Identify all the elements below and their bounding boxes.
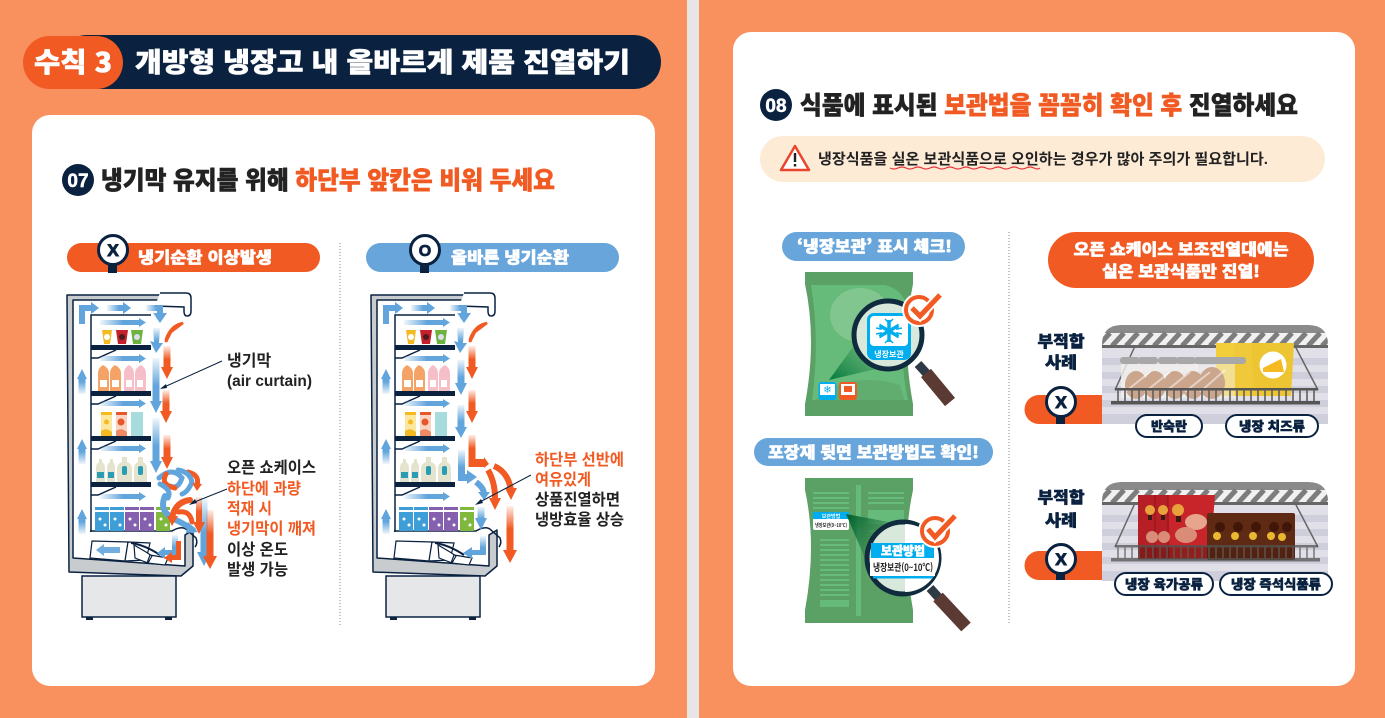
- label: unsuitable case: [1038, 328, 1085, 373]
- package front with magnifier: ❄: [823, 385, 832, 396]
- package back with magnifier: 냉장보관(0~10℃): [815, 522, 847, 529]
- warning note: 냉장식품을 실온 보관식품으로 오인하는 경우가 많아 주의가 필요합니다.: [818, 151, 1268, 168]
- label: unsuitable case: [1038, 484, 1085, 531]
- pill: correct circulation: O: [419, 243, 431, 260]
- center divider: [687, 0, 699, 718]
- pill: open showcase rule: 실온 보관식품만 진열!: [1102, 258, 1260, 282]
- example 1: [1024, 325, 1334, 437]
- pill: label check: [782, 232, 965, 261]
- label: bottom shelf room: [535, 451, 624, 529]
- label: unsuitable case: 부적합: [1038, 484, 1085, 508]
- label: bottom shelf room: 하단부 선반에: [535, 451, 624, 469]
- label: overloading warning: 냉기막이 깨져: [227, 520, 316, 538]
- orange tab with X: [1024, 388, 1102, 424]
- label: bottom shelf room: 냉방효율 상승: [535, 511, 624, 529]
- tag: soft boiled egg: 반숙란: [1151, 416, 1187, 435]
- title banner: 개방형 냉장고 내 올바르게 제품 진열하기: [135, 41, 630, 80]
- pill: abnormal circulation: [67, 236, 320, 273]
- broken curtain swirl: [159, 470, 202, 533]
- label: overloading warning: 발생 가능: [227, 561, 288, 579]
- package back with magnifier: 보관방법: [881, 542, 925, 559]
- orange tab with X: X: [1055, 550, 1067, 569]
- package front with magnifier: [805, 272, 950, 416]
- tag: refrigerated processed meat: 냉장 육가공류: [1125, 574, 1203, 593]
- heading 07: 07: [67, 171, 89, 192]
- air curtain blue arrows: [150, 328, 163, 473]
- tag: refrigerated cheese: [1226, 415, 1318, 437]
- orange tab with X: X: [1055, 393, 1067, 412]
- label: overloading warning: 이상 온도: [227, 541, 288, 559]
- label: bottom shelf room: 여유있게: [535, 471, 591, 489]
- red arrows deflected: [466, 323, 517, 563]
- tag: soft boiled egg: [1136, 415, 1202, 437]
- label: bottom shelf room: 상품진열하면: [535, 491, 620, 509]
- title banner: [23, 35, 661, 89]
- blue curtain arrows: [454, 328, 490, 559]
- pill: correct circulation: [366, 236, 619, 273]
- tag: refrigerated processed meat: [1115, 573, 1213, 595]
- label: air curtain: [227, 352, 312, 390]
- shelf with meat and ready meals: [1098, 482, 1334, 581]
- pill: back label check: 포장재 뒷면 보관방법도 확인!: [768, 439, 979, 463]
- tag: refrigerated ready meals: 냉장 즉석식품류: [1231, 574, 1321, 593]
- red warm air arrows: [160, 323, 183, 469]
- pill: open showcase rule: [1048, 232, 1314, 288]
- example 2: [1024, 482, 1334, 595]
- warning note: [760, 136, 1325, 182]
- label: overloading warning: [227, 459, 316, 579]
- pill: correct circulation: 올바른 냉기순환: [451, 244, 569, 268]
- label: unsuitable case: 부적합: [1038, 328, 1085, 352]
- heading 07: 냉기막 유지를 위해 하단부 앞칸은 비워 두세요: [101, 161, 555, 197]
- shelf with eggs and cheese: [1098, 325, 1334, 424]
- tag: refrigerated cheese: 냉장 치즈류: [1239, 416, 1305, 435]
- pill: abnormal circulation: 냉기순환 이상발생: [138, 244, 272, 268]
- package front with magnifier: 냉장보관: [874, 349, 904, 360]
- label: air curtain: 냉기막: [227, 352, 271, 370]
- callout lines: [162, 361, 222, 388]
- tag: refrigerated ready meals: [1220, 573, 1332, 595]
- panel: left card: [32, 115, 655, 686]
- label: overloading warning: 하단에 과량: [227, 480, 301, 498]
- package back with magnifier: 냉장보관(0~10℃): [873, 559, 933, 574]
- pill: abnormal circulation: X: [107, 241, 119, 260]
- label: unsuitable case: 사례: [1045, 349, 1077, 373]
- orange tab with X: [1024, 544, 1102, 580]
- label: overloading warning: 오픈 쇼케이스: [227, 459, 316, 477]
- package back with magnifier: 보관방법: [822, 513, 841, 520]
- label: air curtain: (air curtain): [227, 373, 312, 390]
- pill: open showcase rule: 오픈 쇼케이스 보조진열대에는: [1074, 236, 1289, 260]
- panel: right card: [733, 32, 1355, 686]
- title banner: 수칙 3: [34, 41, 112, 80]
- callout line: [478, 475, 531, 503]
- label: unsuitable case: 사례: [1045, 507, 1077, 531]
- heading 08: 08: [765, 96, 787, 117]
- label: overloading warning: 적재 시: [227, 500, 272, 518]
- package back with magnifier: [805, 478, 966, 627]
- showcase illustration: correct: [371, 293, 531, 620]
- pill: label check: ‘냉장보관’ 표시 체크!: [797, 233, 952, 257]
- showcase illustration: abnormal: [67, 293, 227, 620]
- heading 08: 식품에 표시된 보관법을 꼼꼼히 확인 후 진열하세요: [800, 86, 1298, 122]
